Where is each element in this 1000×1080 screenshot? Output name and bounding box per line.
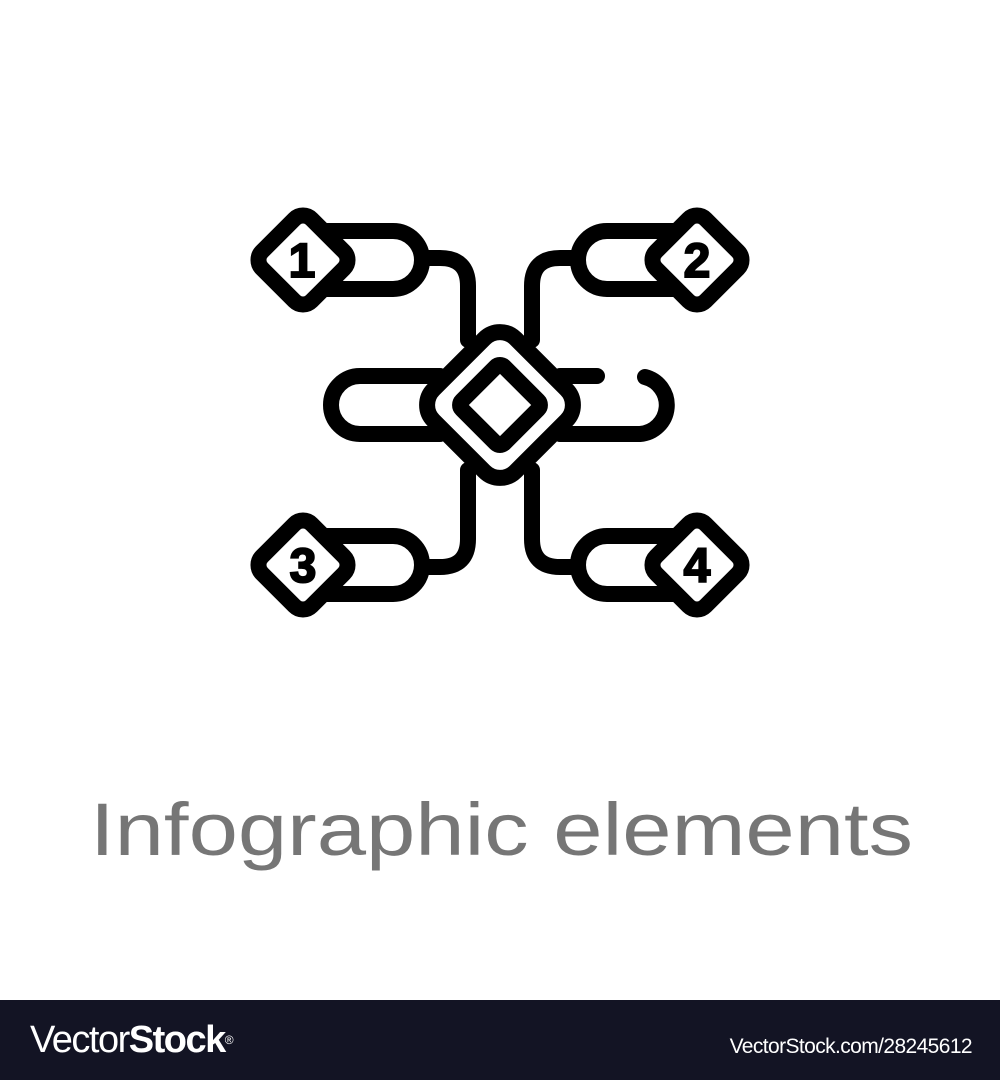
badge numbers: 4 bbox=[684, 540, 711, 593]
pill 3 bbox=[320, 536, 422, 594]
footer bar bbox=[0, 1000, 1000, 1080]
pill: left center bbox=[331, 376, 440, 434]
footer logo: VectorStock® bbox=[30, 1019, 232, 1061]
badge numbers: 1 bbox=[289, 235, 315, 288]
title: Infographic elements bbox=[90, 788, 913, 871]
badge numbers bbox=[289, 235, 711, 593]
connector lines bbox=[422, 258, 667, 567]
badge numbers: 3 bbox=[290, 540, 316, 593]
badge 1 bbox=[254, 211, 352, 309]
badge 4 bbox=[648, 516, 746, 614]
pill 1 bbox=[320, 231, 422, 289]
badge numbers: 2 bbox=[684, 235, 710, 288]
pill 4 bbox=[578, 536, 680, 594]
badge 3 bbox=[254, 516, 352, 614]
pill 2 bbox=[578, 231, 680, 289]
badge 2 bbox=[648, 211, 746, 309]
footer url: VectorStock.com/28245612 bbox=[730, 1035, 972, 1058]
center diamond bbox=[418, 323, 582, 487]
